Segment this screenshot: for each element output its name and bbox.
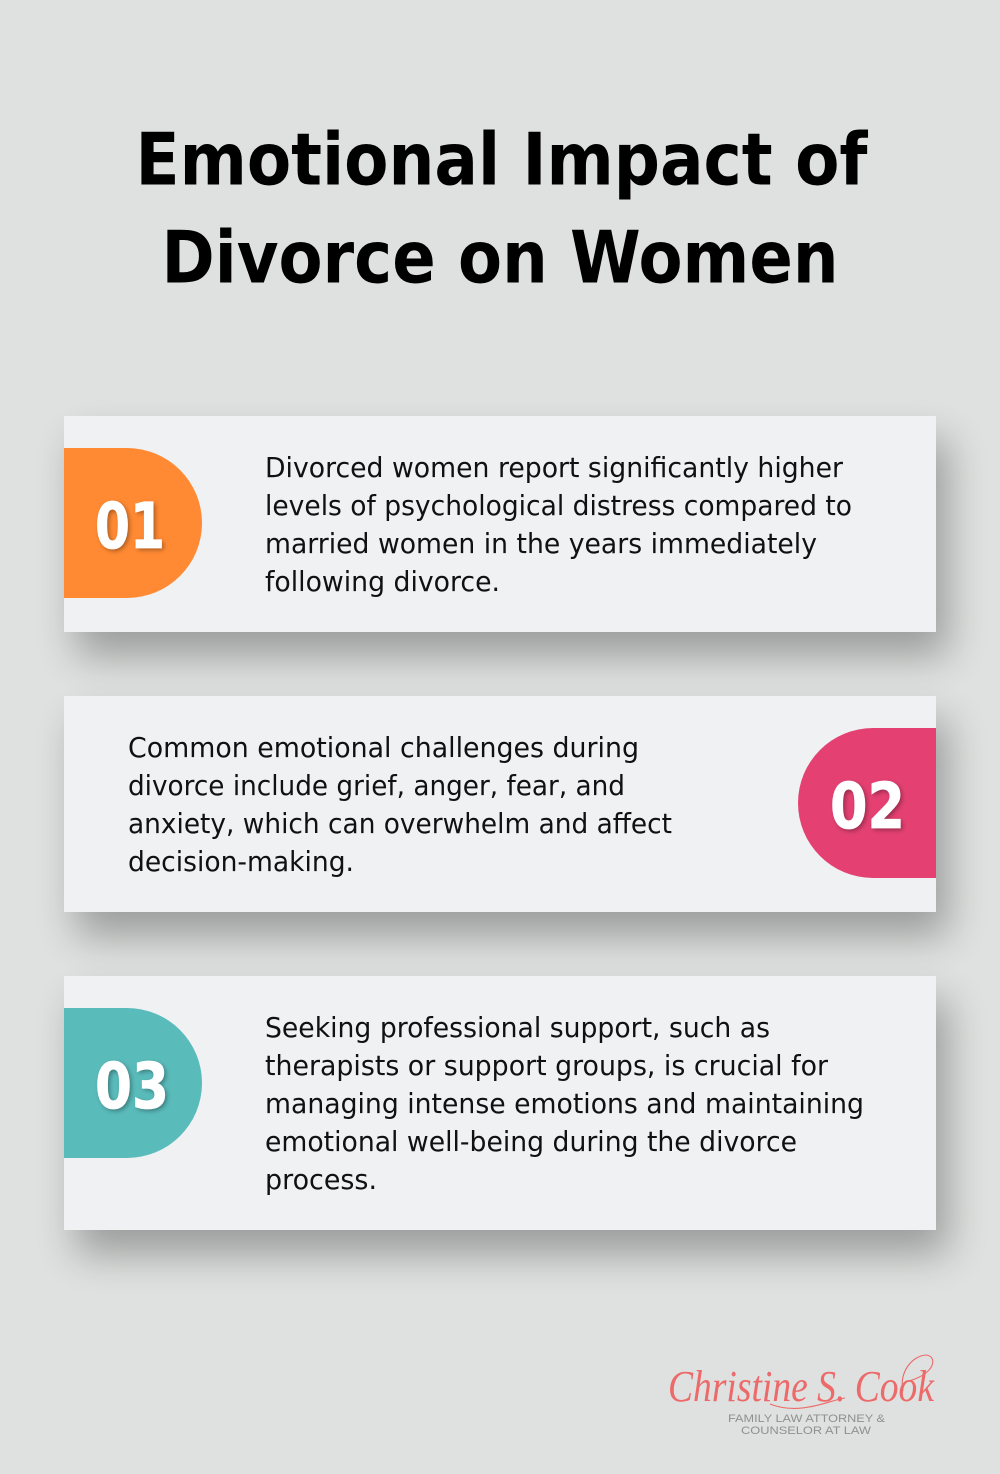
badge: 01: 01	[97, 492, 167, 565]
logo: Christine S. Cook: Christine S. Cook	[668, 1362, 935, 1411]
text: card 02 body: divorce include grief, anger, fear, and	[128, 769, 625, 802]
text: card 03 body: managing intense emotions and maintaining	[265, 1087, 864, 1120]
title: Divorce on Women	[162, 216, 838, 300]
text: card 01 body: following divorce.	[265, 565, 500, 598]
text: card 01 body	[265, 451, 852, 598]
badge: 03	[64, 1008, 202, 1158]
badge: 01: 01	[95, 490, 165, 563]
text: card 01 body: Divorced women report significantly higher	[265, 451, 843, 484]
badge: 01	[64, 448, 202, 598]
badge: 03: 03	[97, 1052, 171, 1125]
text: card 02 body: anxiety, which can overwhelm and affect	[128, 807, 672, 840]
text: card 03 body: Seeking professional support, such as	[265, 1011, 770, 1044]
panel: card 03	[64, 976, 948, 1254]
badge: 03: 03	[95, 1050, 169, 1123]
panel: card 02	[64, 696, 948, 936]
text: card 03 body	[265, 1011, 864, 1196]
text: card 03 body: emotional well-being during the divorce	[265, 1125, 797, 1158]
text: card 03 body: process.	[265, 1163, 377, 1196]
badge: 02: 02	[832, 772, 907, 845]
badge: 02	[798, 728, 936, 878]
panel: card 01	[64, 416, 948, 656]
logo: Christine S. Cook: COUNSELOR AT LAW	[741, 1425, 872, 1437]
logo: Christine S. Cook: FAMILY LAW ATTORNEY &	[728, 1413, 886, 1425]
text: card 03 body: therapists or support groups, is crucial for	[265, 1049, 828, 1082]
badge: 02: 02	[830, 770, 905, 843]
text: card 02 body: decision-making.	[128, 845, 354, 878]
text: card 01 body: levels of psychological distress compared to	[265, 489, 852, 522]
title: Emotional Impact of	[136, 118, 868, 202]
text: card 02 body: Common emotional challenges during	[128, 731, 639, 764]
title	[136, 118, 868, 300]
logo: Christine S. Cook	[668, 1355, 935, 1437]
text: card 01 body: married women in the years immediately	[265, 527, 817, 560]
text: card 02 body	[128, 731, 672, 878]
